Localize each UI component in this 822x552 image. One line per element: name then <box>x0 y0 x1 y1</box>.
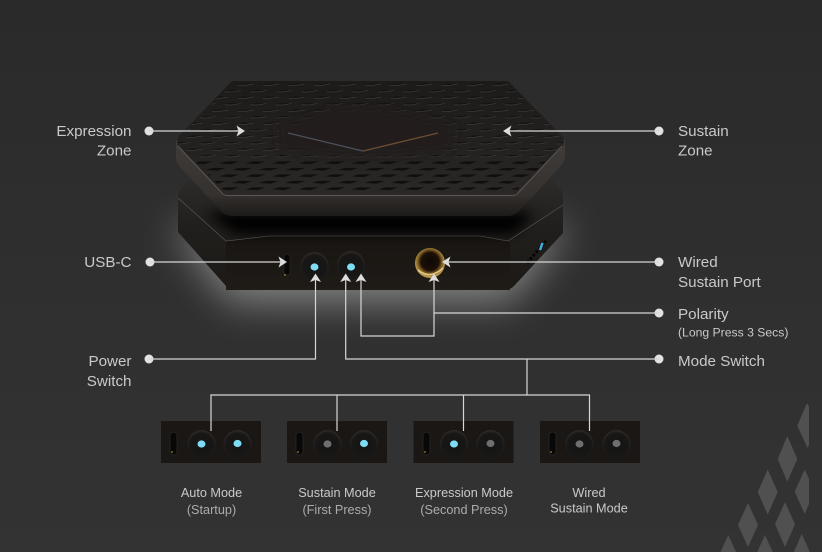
chevron groove <box>288 133 438 151</box>
mode panel: sustain mode <box>287 421 387 517</box>
callout: expression zone <box>56 123 245 160</box>
mode panel: sustain mode: Sustain Mode <box>298 486 376 500</box>
callout: sustain zone: Zone <box>678 142 713 160</box>
mode switch button <box>337 251 365 279</box>
mode panel: auto mode: Auto Mode <box>181 486 242 500</box>
callout: mode switch: Mode Switch <box>678 353 765 370</box>
glow behind device <box>172 225 570 302</box>
decorative diamond pattern <box>720 403 809 552</box>
mode panel: wired sustain mode <box>540 421 640 516</box>
callout: polarity: Polarity <box>678 306 729 323</box>
mode panel: auto mode <box>161 421 261 517</box>
device illustration <box>170 81 570 290</box>
infographic canvas <box>58 81 809 552</box>
power switch button <box>300 252 328 280</box>
callout: wired sustain port: Sustain Port <box>678 274 762 291</box>
device base <box>178 188 563 290</box>
mode panel: expression mode: Expression Mode <box>415 486 513 500</box>
callout: expression zone: Zone <box>97 142 132 160</box>
callout: sustain zone <box>503 123 729 160</box>
mode switch connector tree <box>211 359 590 431</box>
pedal plate top surface <box>170 81 570 196</box>
mode panel: expression mode <box>414 421 514 517</box>
callout: power switch: Power <box>88 353 132 370</box>
mode panel: expression mode: (Second Press) <box>420 503 508 517</box>
smooth central chevron area <box>276 109 456 155</box>
callout: polarity <box>356 274 788 340</box>
mode panel: wired sustain mode: Sustain Mode <box>550 502 628 516</box>
pedal plate side skirt <box>176 140 565 216</box>
callout: polarity: (Long Press 3 Secs) <box>678 326 788 340</box>
callout: wired sustain port: Wired <box>678 254 718 271</box>
callout: wired sustain port <box>442 254 762 291</box>
callout: power switch: Switch <box>87 373 132 390</box>
callout: power switch <box>87 274 321 390</box>
callout: USB-C <box>84 254 287 271</box>
side indicator <box>527 241 546 263</box>
callout: expression zone: Expression <box>56 123 132 140</box>
callout: sustain zone: Sustain <box>678 123 729 140</box>
mode panel: auto mode: (Startup) <box>187 503 236 517</box>
callout: USB-C: USB-C <box>84 254 132 271</box>
wired sustain port <box>415 248 445 278</box>
mode panel: wired sustain mode: Wired <box>572 486 606 500</box>
mode panel: sustain mode: (First Press) <box>302 503 372 517</box>
USB-C socket <box>284 254 290 276</box>
callout: mode switch <box>340 274 765 370</box>
